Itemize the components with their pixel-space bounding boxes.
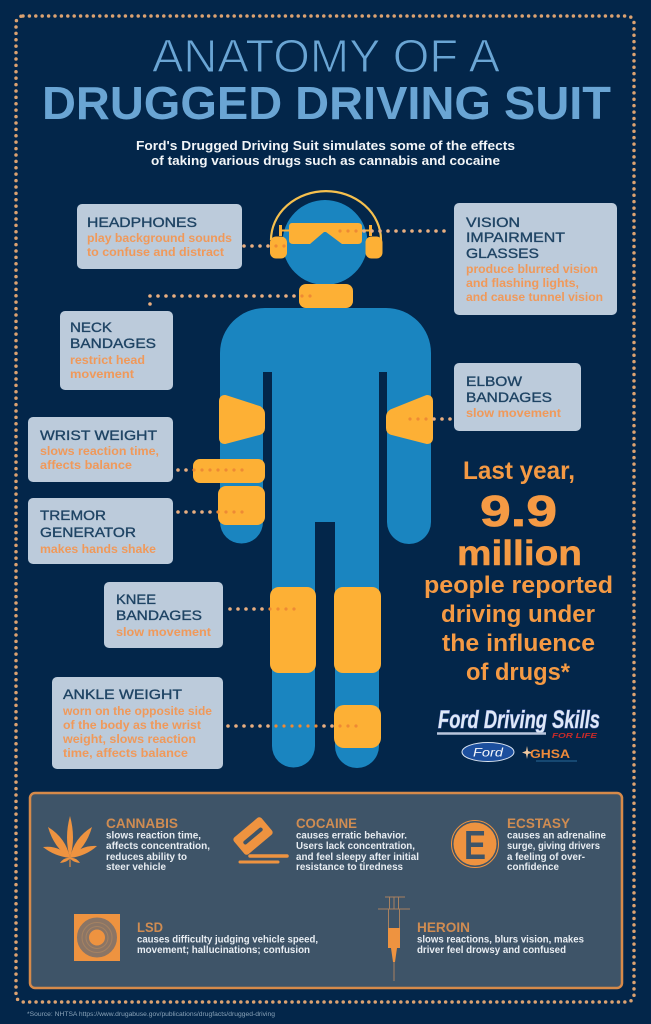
- title: [42, 30, 611, 129]
- label: ankle weight: [52, 677, 223, 769]
- label: headphones: play background sounds: [87, 233, 232, 245]
- icon: ecstasy E pill: E: [464, 822, 486, 868]
- text: cocaine: COCAINE: [296, 815, 357, 831]
- text: heroin: slows reactions, blurs vision, makes: [417, 934, 584, 946]
- ankle weight: [334, 705, 381, 748]
- head: [282, 200, 368, 285]
- logo: Ford Driving Skills for Life: [437, 706, 600, 740]
- label: neck bandages: movement: [70, 369, 134, 381]
- text: heroin: driver feel drowsy and confused: [417, 945, 566, 956]
- vision impairment glasses: [280, 223, 370, 244]
- label: ankle weight: worn on the opposite side: [62, 706, 212, 718]
- text: cannabis: reduces ability to: [106, 852, 187, 863]
- label: elbow bandages: slow movement: [466, 408, 561, 420]
- label: ankle weight: ANKLE WEIGHT: [63, 686, 182, 702]
- wrist weight: [193, 459, 265, 483]
- logo: GHSA: GHSA: [530, 747, 570, 761]
- text: cannabis: CANNABIS: [106, 815, 178, 831]
- statistic callout: million: [457, 534, 582, 573]
- text: ecstasy: a feeling of over-: [507, 852, 585, 863]
- text: ecstasy: [507, 815, 606, 873]
- statistic callout: the influence: [442, 630, 595, 657]
- subtitle: Ford's Drugged Driving Suit simulates some of the effects: [136, 138, 515, 153]
- icon: heroin syringe: [378, 897, 410, 981]
- label: headphones: [77, 204, 242, 269]
- label: ankle weight: weight, slows reaction: [62, 734, 196, 746]
- label: tremor generator: [28, 498, 173, 564]
- label: wrist weight: affects balance: [40, 460, 132, 472]
- icon: LSD blotter square: [74, 914, 120, 961]
- label: vision impairment glasses: IMPAIRMENT: [466, 229, 566, 245]
- label: elbow bandages: [454, 363, 581, 431]
- icon: cannabis leaf: [43, 816, 97, 867]
- logo: GHSA: [522, 746, 577, 761]
- text: ecstasy: causes an adrenaline: [507, 830, 606, 842]
- title: DRUGGED DRIVING SUIT: [42, 77, 611, 129]
- right knee bandage: [334, 587, 381, 673]
- logo: Ford Driving Skills for Life: FOR LIFE: [552, 733, 597, 740]
- label: tremor generator: GENERATOR: [40, 524, 136, 540]
- text: LSD: movement; hallucinations; confusion: [137, 945, 310, 956]
- label: tremor generator: makes hands shake: [40, 544, 156, 556]
- label: neck bandages: BANDAGES: [70, 335, 156, 351]
- left elbow bandage: [222, 398, 262, 441]
- label: neck bandages: NECK: [70, 319, 113, 335]
- label: vision impairment glasses: VISION: [466, 214, 520, 230]
- label: neck bandages: restrict head: [70, 355, 145, 367]
- label: vision impairment glasses: GLASSES: [466, 245, 539, 261]
- statistic callout: driving under: [441, 601, 595, 628]
- figure body: [220, 308, 431, 768]
- text: ecstasy: surge, giving drivers: [507, 841, 600, 852]
- text: cannabis: affects concentration,: [106, 841, 210, 852]
- text: ecstasy: confidence: [507, 862, 559, 873]
- statistic callout: [424, 457, 613, 686]
- statistic callout: Last year,: [463, 457, 575, 485]
- statistic callout: 9.9: [480, 487, 557, 536]
- label: tremor generator: TREMOR: [40, 507, 106, 523]
- label: wrist weight: slows reaction time,: [40, 446, 159, 458]
- logo: Ford oval: [462, 742, 514, 762]
- label: headphones: HEADPHONES: [87, 214, 197, 230]
- label: knee bandages: [104, 582, 223, 648]
- text: cocaine: and feel sleepy after initial: [296, 852, 419, 863]
- label: vision impairment glasses: and cause tunnel vision: [466, 292, 603, 304]
- tremor generator: [218, 486, 265, 525]
- icon: razor blade and lines: [232, 816, 287, 862]
- logo: Ford oval: Ford: [473, 746, 503, 760]
- subtitle: of taking various drugs such as cannabis and cocaine: [151, 153, 500, 168]
- label: wrist weight: WRIST WEIGHT: [40, 427, 157, 443]
- headphones: [270, 191, 382, 258]
- text: LSD: LSD: [137, 919, 163, 935]
- text: cocaine: Users lack concentration,: [296, 841, 415, 852]
- label: vision impairment glasses: and flashing lights,: [466, 278, 579, 290]
- text: heroin: [417, 919, 584, 956]
- label: elbow bandages: ELBOW: [466, 373, 523, 389]
- text: cannabis: steer vehicle: [106, 862, 166, 873]
- panel: drug effects: [30, 793, 622, 988]
- text: cannabis: slows reaction time,: [106, 830, 201, 842]
- left knee bandage: [270, 587, 316, 673]
- text: LSD: [137, 919, 318, 956]
- label: wrist weight: [28, 417, 173, 482]
- connector dots: [150, 231, 451, 726]
- source note: *Source: NHTSA https://www.drugabuse.gov/publications/drugfacts/drugged-driving: [27, 1011, 275, 1018]
- text: cocaine: causes erratic behavior.: [296, 830, 407, 842]
- label: ankle weight: of the body as the wrist: [63, 720, 201, 732]
- label: knee bandages: KNEE: [116, 591, 156, 607]
- text: cannabis: [106, 815, 210, 873]
- label: headphones: to confuse and distract: [87, 247, 224, 259]
- right elbow bandage: [389, 398, 430, 441]
- label: neck bandages: [60, 311, 173, 390]
- label: elbow bandages: BANDAGES: [466, 389, 552, 405]
- statistic callout: people reported: [424, 572, 613, 599]
- text: LSD: causes difficulty judging vehicle speed,: [137, 934, 318, 946]
- text: ecstasy: ECSTASY: [507, 815, 571, 831]
- label: knee bandages: slow movement: [116, 627, 211, 639]
- text: cocaine: resistance to tiredness: [296, 862, 403, 873]
- title: ANATOMY OF A: [152, 30, 500, 82]
- label: vision impairment glasses: produce blurred vision: [466, 264, 598, 276]
- text: cocaine: [296, 815, 419, 873]
- label: vision impairment glasses: [454, 203, 617, 315]
- label: knee bandages: BANDAGES: [116, 607, 202, 623]
- subtitle: [136, 138, 515, 168]
- icon: ecstasy E pill: [452, 820, 498, 868]
- suited figure: [193, 191, 431, 768]
- label: ankle weight: time, affects balance: [63, 748, 188, 760]
- statistic callout: of drugs*: [466, 659, 571, 686]
- text: heroin: HEROIN: [417, 919, 470, 935]
- neck bandage: [299, 284, 353, 308]
